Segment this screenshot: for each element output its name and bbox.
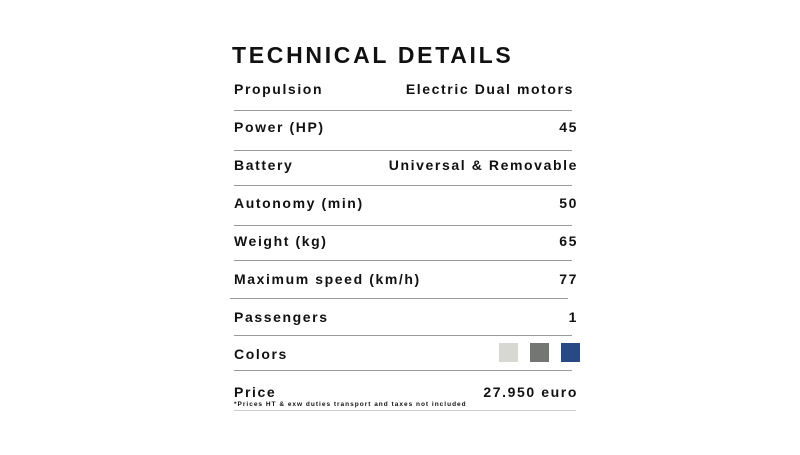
row: autonomy: Autonomy (min) [234, 195, 364, 211]
title: TECHNICAL DETAILS [232, 42, 513, 68]
row: power: Power (HP) [234, 119, 325, 135]
row: propulsion: Electric Dual motors [406, 81, 574, 97]
row: weight [234, 233, 578, 249]
row: weight: 65 [559, 233, 578, 249]
row: autonomy [234, 195, 578, 211]
row: max speed: Maximum speed (km/h) [234, 271, 421, 287]
row: colors [234, 343, 580, 362]
swatch: light grey [499, 343, 518, 362]
row: propulsion: Propulsion [234, 81, 323, 97]
row: power [234, 119, 578, 135]
row: price: 27.950 euro [483, 384, 578, 400]
row: max speed: 77 [559, 271, 578, 287]
row: max speed [234, 271, 578, 287]
row: passengers [234, 309, 578, 325]
row: battery: Battery [234, 157, 293, 173]
row: passengers: Passengers [234, 309, 329, 325]
swatch: blue [561, 343, 580, 362]
row: price [234, 384, 578, 400]
row: propulsion [234, 81, 574, 97]
swatch: dark grey [530, 343, 549, 362]
row: weight: Weight (kg) [234, 233, 328, 249]
row: price: Price [234, 384, 276, 400]
row: power: 45 [559, 119, 578, 135]
row: autonomy: 50 [559, 195, 578, 211]
row: passengers: 1 [569, 309, 578, 325]
row: colors: Colors [234, 346, 288, 362]
footnote: *Prices HT & exw duties transport and taxes not included [234, 401, 467, 408]
row: battery [234, 157, 578, 173]
row: battery: Universal & Removable [389, 157, 578, 173]
